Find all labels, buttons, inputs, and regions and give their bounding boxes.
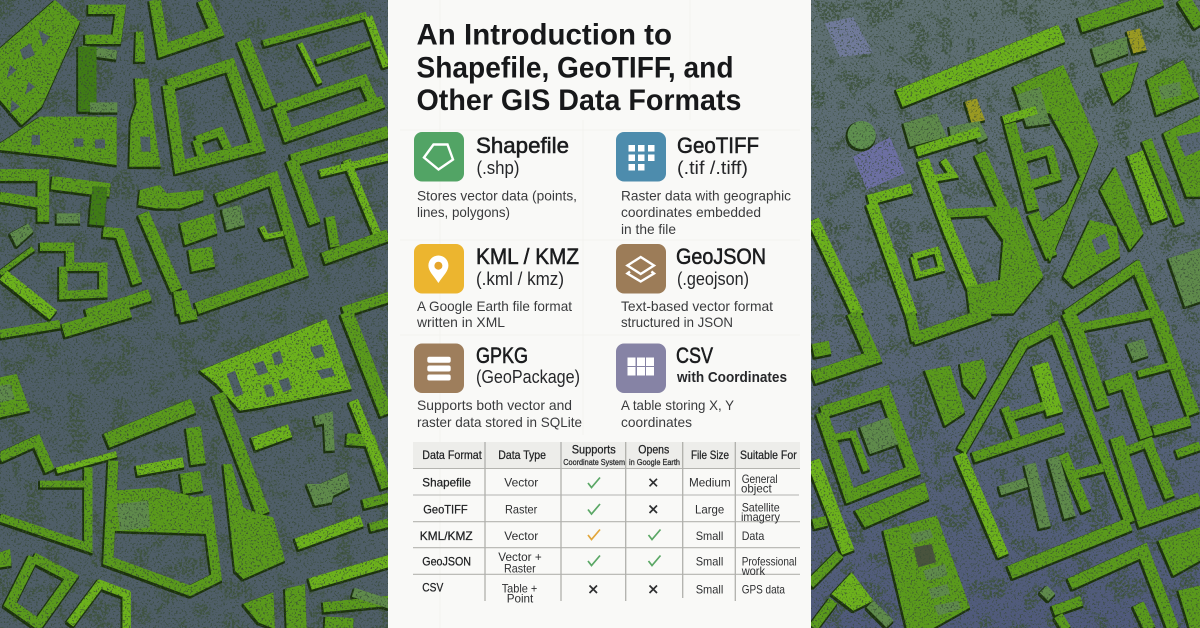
table header row: in Google Earth — [629, 457, 680, 467]
table header background — [413, 442, 800, 468]
description — [621, 188, 791, 237]
table header row: Data Type — [498, 448, 546, 462]
description: A table storing X, Y — [621, 397, 735, 413]
row: GeoTIFF: Raster — [505, 502, 537, 516]
description: written in XML — [416, 314, 505, 330]
description: in the file — [621, 221, 676, 237]
extension: (.kml / kmz) — [476, 269, 564, 289]
description: coordinates embedded — [621, 204, 761, 220]
card: KML / KMZ — [414, 244, 579, 330]
row: CSV: GPS data — [742, 582, 785, 596]
description — [417, 397, 582, 430]
panel: white centre column — [388, 0, 811, 628]
description — [621, 397, 735, 430]
row: GeoJSON: Professional — [742, 555, 797, 569]
row: KML/KMZ: KML/KMZ — [420, 529, 473, 543]
comparison table — [413, 442, 800, 606]
row: KML/KMZ: Small — [696, 529, 723, 543]
title — [416, 18, 742, 117]
icon: map pin — [414, 244, 464, 294]
title: Shapefile, GeoTIFF, and — [416, 52, 734, 84]
description: coordinates — [621, 414, 692, 430]
description: lines, polygons) — [417, 204, 510, 220]
background map: left side — [0, 0, 390, 628]
row: GeoJSON: Raster — [504, 561, 536, 575]
background map: tree and speckle texture, left — [0, 0, 390, 628]
description: structured in JSON — [621, 314, 733, 330]
background map: right side — [810, 0, 1200, 628]
description: A Google Earth file format — [417, 298, 572, 314]
row: GeoJSON — [422, 550, 797, 578]
description — [621, 298, 773, 330]
row: Shapefile: object — [741, 482, 772, 496]
description: Text-based vector format — [621, 298, 773, 314]
row: GeoJSON: GeoJSON — [422, 555, 471, 569]
extension: (.shp) — [476, 158, 520, 178]
description: Raster data with geographic — [621, 188, 791, 204]
extension: with Coordinates — [676, 369, 787, 386]
table header row — [422, 442, 797, 467]
row: Shapefile — [422, 472, 778, 496]
extension: (.tif /.tiff) — [677, 158, 748, 178]
row: Shapefile: General — [742, 472, 778, 486]
table header row: Opens — [638, 442, 669, 456]
extension: (GeoPackage) — [476, 367, 580, 387]
icon: database rows — [414, 344, 464, 393]
row: CSV: CSV — [422, 581, 443, 595]
row: Shapefile: Vector — [504, 476, 538, 490]
row: Shapefile: Medium — [689, 476, 731, 490]
title: An Introduction to — [416, 18, 672, 52]
row: CSV — [422, 581, 785, 606]
title: Other GIS Data Formats — [416, 84, 742, 117]
row: CSV: Table + — [502, 581, 537, 595]
extension: (.geojson) — [677, 269, 749, 289]
table header row: Coordinate System — [563, 457, 625, 467]
description: Stores vector data (points, — [417, 188, 577, 204]
row: KML/KMZ: Vector — [504, 529, 538, 543]
row: CSV: Point — [507, 592, 534, 606]
row: KML/KMZ: Data — [742, 529, 765, 543]
row: KML/KMZ — [420, 529, 765, 543]
heading: CSV — [676, 343, 713, 368]
card: GeoTIFF — [616, 132, 791, 237]
heading: KML / KMZ — [476, 244, 579, 269]
heading: GPKG — [476, 343, 528, 368]
heading: Shapefile — [476, 133, 569, 158]
table header row: Data Format — [422, 448, 482, 462]
row: GeoJSON: Vector + — [498, 550, 542, 564]
table header row: Suitable For — [740, 448, 797, 462]
description — [417, 188, 577, 220]
background map: tree and speckle texture, right — [810, 0, 1200, 628]
description — [416, 298, 572, 330]
card: GeoJSON — [616, 244, 773, 330]
row: GeoTIFF: Large — [695, 502, 725, 516]
heading: GeoTIFF — [677, 133, 759, 158]
description: Supports both vector and — [417, 397, 572, 413]
icon: raster grid — [616, 132, 666, 182]
card: CSV — [616, 343, 787, 430]
heading: GeoJSON — [676, 244, 766, 269]
card: GPKG — [414, 343, 582, 430]
icon: stacked layers — [616, 244, 666, 294]
table header row: Supports — [572, 442, 616, 456]
card: Shapefile — [414, 132, 577, 220]
row: Shapefile: Shapefile — [422, 476, 471, 490]
row: GeoJSON: work — [741, 564, 766, 578]
row: GeoTIFF: Satellite — [742, 500, 780, 514]
row: GeoTIFF: imagery — [741, 510, 780, 524]
row: GeoTIFF: GeoTIFF — [423, 502, 468, 516]
description: raster data stored in SQLite — [417, 414, 582, 430]
row: GeoTIFF — [423, 500, 780, 524]
icon: table grid — [616, 344, 666, 393]
row: GeoJSON: Small — [696, 555, 723, 569]
purple plaza — [825, 17, 905, 190]
row: CSV: Small — [696, 582, 723, 596]
table header row: File Size — [691, 448, 729, 462]
icon: pentagon — [414, 132, 464, 182]
